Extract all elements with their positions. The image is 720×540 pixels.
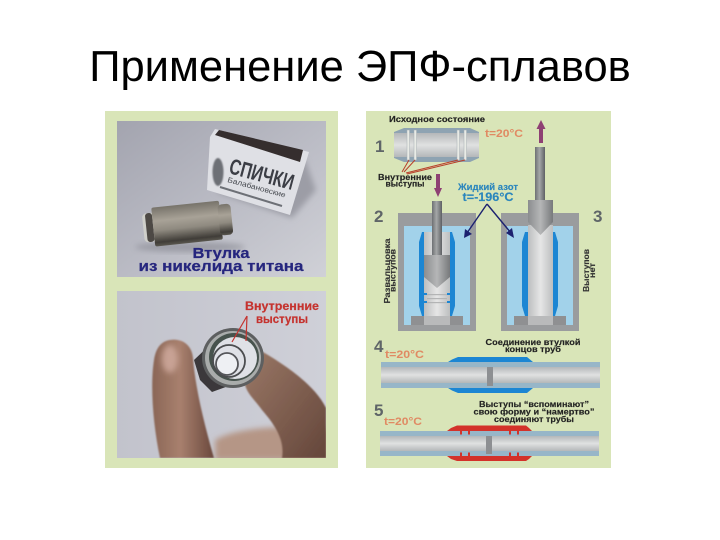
icon: matchbox: Балабановские — [226, 175, 287, 199]
panel: photographs — [105, 111, 338, 468]
icon: matchbox: СПИЧКИ — [227, 154, 297, 195]
step 5: protrusions recover shape: t=20°C — [384, 416, 422, 428]
step 1: initial state: 1 — [375, 137, 384, 156]
photo caption: из никелида титана — [138, 258, 304, 275]
label: inner protrusions — [378, 172, 432, 188]
panel: process diagram — [366, 111, 611, 468]
infographic canvas — [105, 111, 611, 468]
arrows: to nitrogen baths — [464, 204, 514, 238]
step 4: sleeve joining pipe ends: 4 — [374, 337, 384, 356]
step 5: protrusions recover shape: соединяют трубы — [494, 414, 574, 424]
label: no protrusions: нет — [588, 263, 597, 278]
photo caption: Втулка — [192, 245, 250, 262]
icon: sleeve end view — [194, 328, 264, 392]
label: rolling out protrusions: Развальцовка — [383, 238, 392, 304]
label: liquid nitrogen: t=-196°C — [462, 190, 514, 204]
step 2: expansion of protrusions: 2 — [374, 207, 383, 226]
photo caption with pointers — [232, 299, 319, 342]
photo: sleeve and matchbox — [117, 121, 326, 277]
step 5: protrusions recover shape — [374, 399, 599, 461]
step 5: protrusions recover shape: свою форму и “намертво” — [474, 406, 594, 416]
label: rolling out protrusions — [383, 238, 398, 304]
label: rolling out protrusions: выступов — [388, 249, 398, 292]
label: liquid nitrogen — [457, 182, 519, 204]
step 4: sleeve joining pipe ends: Соединение втулкой — [486, 337, 580, 347]
photo: sleeve held in fingers — [117, 291, 330, 460]
step 4: sleeve joining pipe ends — [374, 337, 600, 393]
arrow: up out of step 3 — [536, 120, 546, 143]
step 1: initial state — [375, 114, 523, 174]
step 1: initial state: t=20°C — [485, 128, 523, 140]
icon: matchbox — [207, 129, 316, 218]
step 3: no protrusions — [501, 147, 602, 331]
step 1: initial state: Исходное состояние — [389, 114, 485, 124]
photo caption — [140, 248, 304, 274]
arrow: down into step 2 — [434, 174, 442, 197]
step 2: expansion of protrusions — [374, 201, 476, 331]
step 5: protrusions recover shape: 5 — [374, 401, 383, 420]
label: liquid nitrogen: Жидкий азот — [457, 182, 519, 192]
label: inner protrusions: выступы — [386, 178, 424, 188]
title: Применение ЭПФ-сплавов — [89, 43, 631, 91]
step 3: no protrusions: 3 — [593, 207, 602, 226]
label: inner protrusions: Внутренние — [378, 172, 432, 182]
label: no protrusions — [582, 249, 597, 292]
step 4: sleeve joining pipe ends: t=20°C — [385, 349, 424, 361]
step 5: protrusions recover shape: Выступы “вспоминают” — [479, 399, 589, 409]
label: no protrusions: Выступов — [582, 249, 591, 292]
photo caption with pointers: выступы — [256, 312, 308, 326]
photo caption with pointers: Внутренние — [245, 299, 319, 313]
icon: metal sleeve — [141, 200, 234, 248]
step 4: sleeve joining pipe ends: концов труб — [505, 344, 561, 354]
